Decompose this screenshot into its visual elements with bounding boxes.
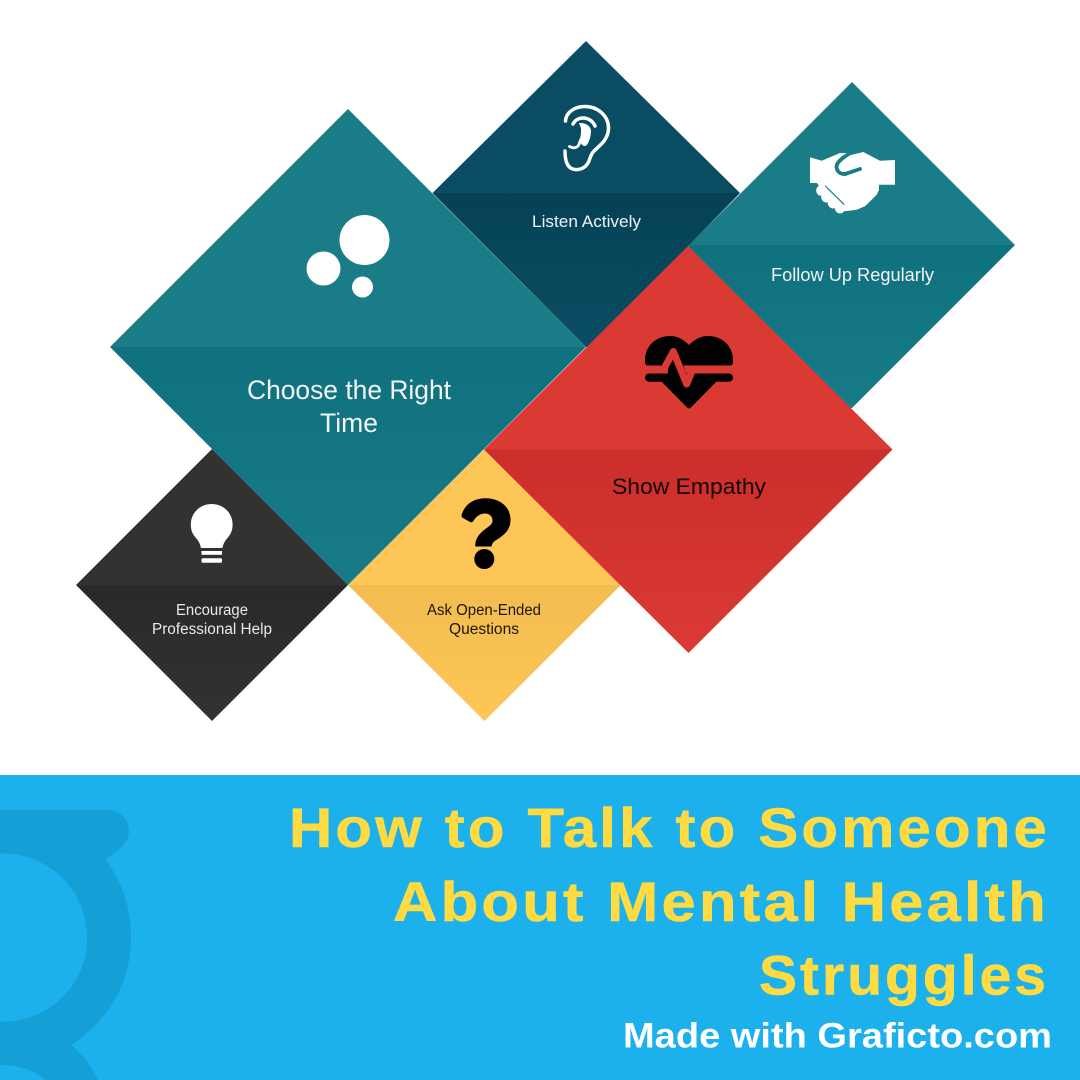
- label: Ask Open-Ended Questions: [427, 602, 541, 638]
- label: Choose the Right Time: Time: [320, 408, 378, 438]
- label: Ask Open-Ended Questions: Ask Open-Ended: [427, 602, 541, 619]
- label: Choose the Right Time: [247, 375, 451, 438]
- panel: Listen Actively diamond: [432, 41, 740, 347]
- label: Choose the Right Time: Choose the Right: [247, 375, 451, 405]
- icon: question mark: [462, 498, 510, 569]
- icon: heart with pulse: [640, 336, 738, 408]
- label: Show Empathy: Show Empathy: [612, 474, 767, 499]
- label: Encourage Professional Help: [152, 602, 272, 638]
- label: Encourage Professional Help: Professional Help: [152, 621, 272, 638]
- panel: Follow Up Regularly diamond: [688, 82, 1015, 408]
- credit line: Made with Graficto.com: [623, 1016, 1052, 1056]
- icon: thought bubbles: [306, 215, 390, 298]
- icon: handshake: [810, 152, 895, 214]
- label: Follow Up Regularly: Follow Up Regularly: [771, 264, 935, 285]
- title: Struggles: [759, 944, 1049, 1006]
- panel: Show Empathy diamond: [484, 246, 892, 653]
- label: Listen Actively: Listen Actively: [532, 212, 641, 231]
- title: About Mental Health: [393, 870, 1049, 933]
- footer band: [0, 775, 1080, 1080]
- label: Encourage Professional Help: Encourage: [176, 602, 248, 619]
- panel: Ask Open-Ended Questions diamond: [348, 449, 621, 721]
- icon: light bulb: [191, 504, 233, 563]
- icon: ear: [565, 106, 608, 170]
- panel: Encourage Professional Help diamond: [76, 449, 348, 721]
- title: [289, 796, 1050, 1006]
- panel: Choose the Right Time diamond: [110, 109, 586, 585]
- label: Ask Open-Ended Questions: Questions: [449, 621, 519, 638]
- title: How to Talk to Someone: [289, 796, 1050, 859]
- icon: Graficto logo watermark: [0, 810, 131, 1080]
